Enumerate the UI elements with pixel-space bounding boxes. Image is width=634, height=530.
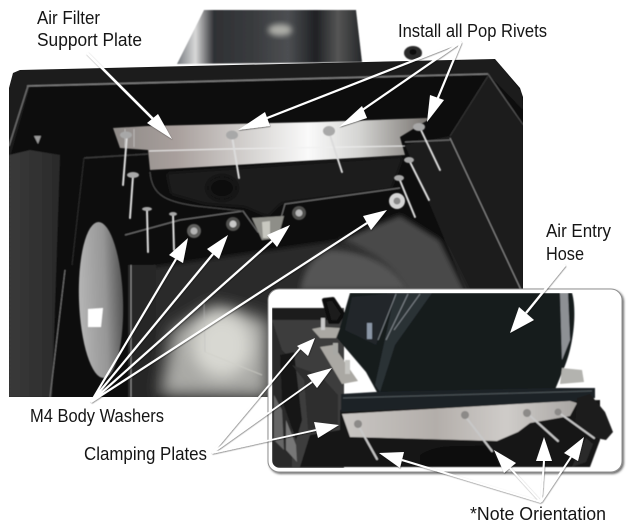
hose — [337, 293, 574, 394]
label: M4 body washers: M4 Body Washers — [30, 406, 164, 426]
bar — [341, 388, 595, 412]
left body — [272, 308, 344, 468]
arrows: M4 body washers — [91, 210, 387, 402]
bracket right — [560, 368, 584, 384]
label: install all pop rivets: Install all Pop Rivets — [398, 21, 547, 41]
rubber grommet — [324, 299, 343, 322]
pop rivets — [120, 123, 440, 252]
arrows: note orientation — [379, 437, 584, 502]
photo: filter lens — [76, 221, 126, 379]
right wall — [405, 76, 523, 300]
arrow: air entry hose — [510, 265, 565, 333]
floor ridge — [125, 188, 400, 235]
label: air filter support plate: Support Plate — [37, 30, 142, 50]
label: air entry hose: Air Entry — [546, 221, 611, 241]
upper basin — [165, 155, 405, 218]
inset rivets — [358, 412, 594, 459]
arrow: air filter support plate — [87, 53, 172, 139]
label: note orientation: *Note Orientation — [470, 504, 606, 524]
end cap — [575, 394, 613, 440]
label: clamping plates: Clamping Plates — [84, 444, 207, 464]
floor — [154, 236, 406, 397]
left wall — [9, 150, 60, 397]
silver tube — [252, 216, 284, 240]
photo: air hose top — [177, 10, 422, 64]
photo: airbox interior — [0, 50, 540, 400]
label: air filter support plate: Air Filter — [37, 8, 100, 28]
support plate — [113, 118, 428, 170]
arrows: install all pop rivets — [238, 42, 461, 130]
rim — [9, 59, 523, 160]
clamping plate — [342, 401, 577, 441]
arrows: clamping plates — [212, 338, 339, 453]
M4 body washers — [187, 193, 405, 238]
side clamps — [312, 327, 340, 338]
inset panel — [268, 289, 622, 472]
inset photo — [272, 293, 613, 468]
black floor — [300, 400, 600, 467]
label: air entry hose: Hose — [546, 244, 584, 264]
